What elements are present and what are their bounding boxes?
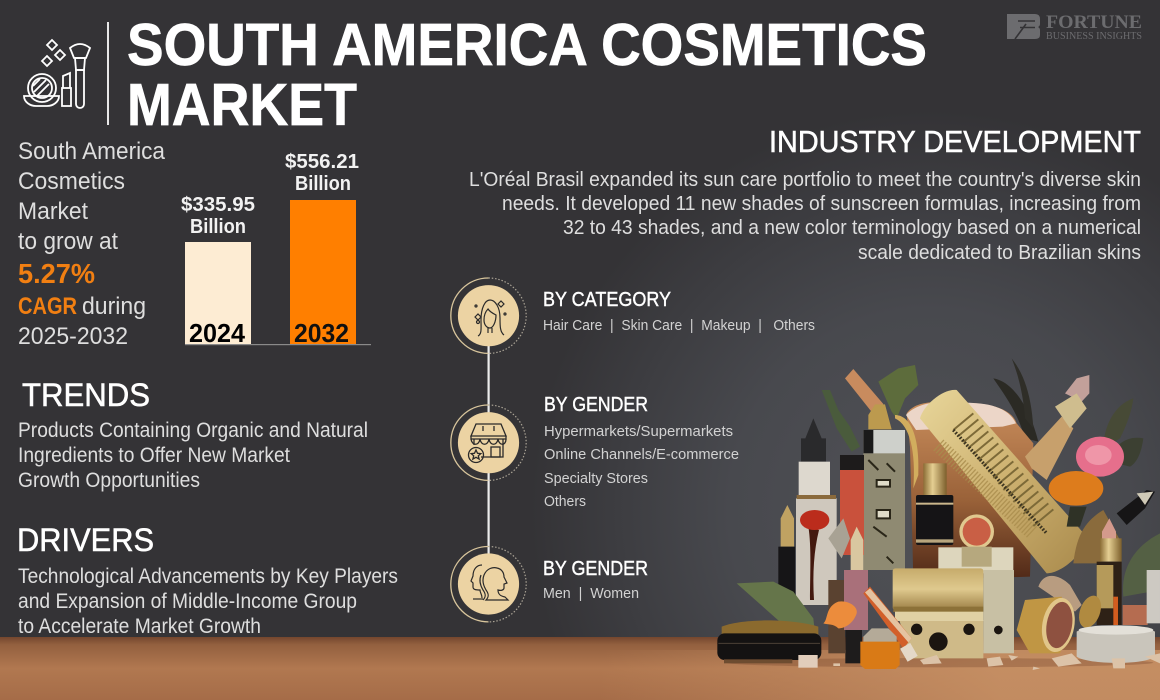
- gold handle: [895, 415, 918, 488]
- pink lipstick: [1025, 375, 1089, 480]
- pale pouch lid: [906, 402, 1016, 430]
- industry development: [469, 124, 1141, 264]
- rose gold pen: [845, 369, 883, 414]
- orange petals and spatula: [823, 587, 918, 662]
- cream box: [938, 547, 1013, 573]
- gender text block: Men | Women: [543, 586, 639, 602]
- blush compact: [959, 514, 994, 549]
- amber bottle: [860, 628, 900, 669]
- distribution text block: [544, 394, 739, 510]
- category text block: BY CATEGORY: [543, 289, 671, 311]
- market growth text: 2025-2032: [18, 323, 128, 350]
- icon: store badge: [451, 405, 526, 480]
- floor shadow: [727, 658, 1153, 667]
- fern leaf: [737, 582, 815, 633]
- logo: Fortune Business Insights: BUSINESS INSIGHTS: [1046, 31, 1142, 42]
- jar with gold lid: [916, 463, 953, 545]
- large gold tube: [920, 390, 1087, 573]
- bar chart: [181, 151, 371, 348]
- industry development: 32 to 43 shades, and a new color terminology based on a numerical: [563, 216, 1141, 239]
- bar: 2032: $556.21: [285, 151, 359, 173]
- drivers section: [17, 522, 398, 638]
- bar: 2024: [181, 194, 255, 348]
- red cylinder: [840, 455, 864, 555]
- mid lipstick and pink jar: [828, 518, 868, 663]
- red flower: [800, 510, 829, 600]
- bar: 2032: 2032: [294, 318, 349, 348]
- icon: hair care badge: [451, 278, 526, 353]
- category text block: [543, 289, 815, 334]
- pink and orange flowers: [1049, 437, 1124, 527]
- distribution text block: Specialty Stores: [544, 471, 648, 487]
- market growth text: CAGR: [18, 293, 77, 320]
- category text block: Hair Care | Skin Care | Makeup | Others: [543, 318, 815, 334]
- bar: 2032: Billion: [295, 173, 351, 195]
- back foliage: [822, 358, 1143, 467]
- rose gold pot: [1017, 576, 1105, 655]
- logo: Fortune Business Insights: FORTUNE: [1046, 12, 1142, 33]
- right leaves and pot: [1123, 533, 1160, 625]
- bag: [907, 402, 1033, 580]
- title: SOUTH AMERICA COSMETICS: [127, 12, 927, 78]
- timeline connector: [488, 346, 490, 554]
- bar: 2024: 2024: [189, 318, 246, 348]
- industry development: scale dedicated to Brazilian skins: [858, 241, 1141, 264]
- market growth text: [18, 138, 166, 350]
- drivers section: and Expansion of Middle-Income Group: [18, 590, 357, 613]
- right small lipstick: [1073, 490, 1155, 625]
- market growth text: Cosmetics: [18, 168, 125, 195]
- market growth text: during: [82, 293, 146, 320]
- industry development: INDUSTRY DEVELOPMENT: [769, 124, 1141, 159]
- drivers section: Technological Advancements by Key Players: [18, 565, 398, 588]
- title: MARKET: [127, 72, 357, 138]
- distribution text block: Online Channels/E-commerce: [544, 447, 739, 463]
- distribution text block: Others: [544, 494, 586, 510]
- market growth text: to grow at: [18, 228, 118, 255]
- icon: cosmetics: [24, 40, 90, 108]
- market growth text: 5.27%: [18, 258, 95, 289]
- dark bowl: [717, 620, 821, 663]
- gender text block: BY GENDER: [543, 558, 648, 580]
- marble dish: [1077, 625, 1155, 663]
- trends section: Products Containing Organic and Natural: [18, 419, 368, 442]
- printed tall tube: [863, 430, 905, 570]
- gold clasp box: [893, 568, 1014, 658]
- market growth text: Market: [18, 198, 88, 225]
- market growth text: South America: [18, 138, 166, 165]
- title divider: [107, 22, 109, 125]
- drivers section: to Accelerate Market Growth: [18, 615, 261, 638]
- crumbs: [798, 653, 1160, 670]
- bar: 2024: $335.95: [181, 194, 255, 216]
- illustration: cosmetics products: [717, 358, 1160, 670]
- trends section: Growth Opportunities: [18, 469, 200, 492]
- title: [127, 12, 927, 138]
- icon: people badge: [451, 546, 526, 622]
- black lipstick: [778, 505, 795, 597]
- white dropper bottle: [796, 418, 837, 605]
- gender text block: [543, 558, 648, 602]
- distribution text block: Hypermarkets/Supermarkets: [544, 424, 733, 440]
- trends section: Ingredients to Offer New Market: [18, 444, 290, 467]
- logo: Fortune Business Insights: [1007, 12, 1142, 42]
- drivers section: DRIVERS: [17, 522, 154, 558]
- distribution text block: BY GENDER: [544, 394, 648, 416]
- bar: 2024: Billion: [190, 216, 246, 238]
- trends section: [18, 377, 368, 492]
- trends section: TRENDS: [22, 377, 150, 413]
- bar: 2032: [285, 151, 359, 348]
